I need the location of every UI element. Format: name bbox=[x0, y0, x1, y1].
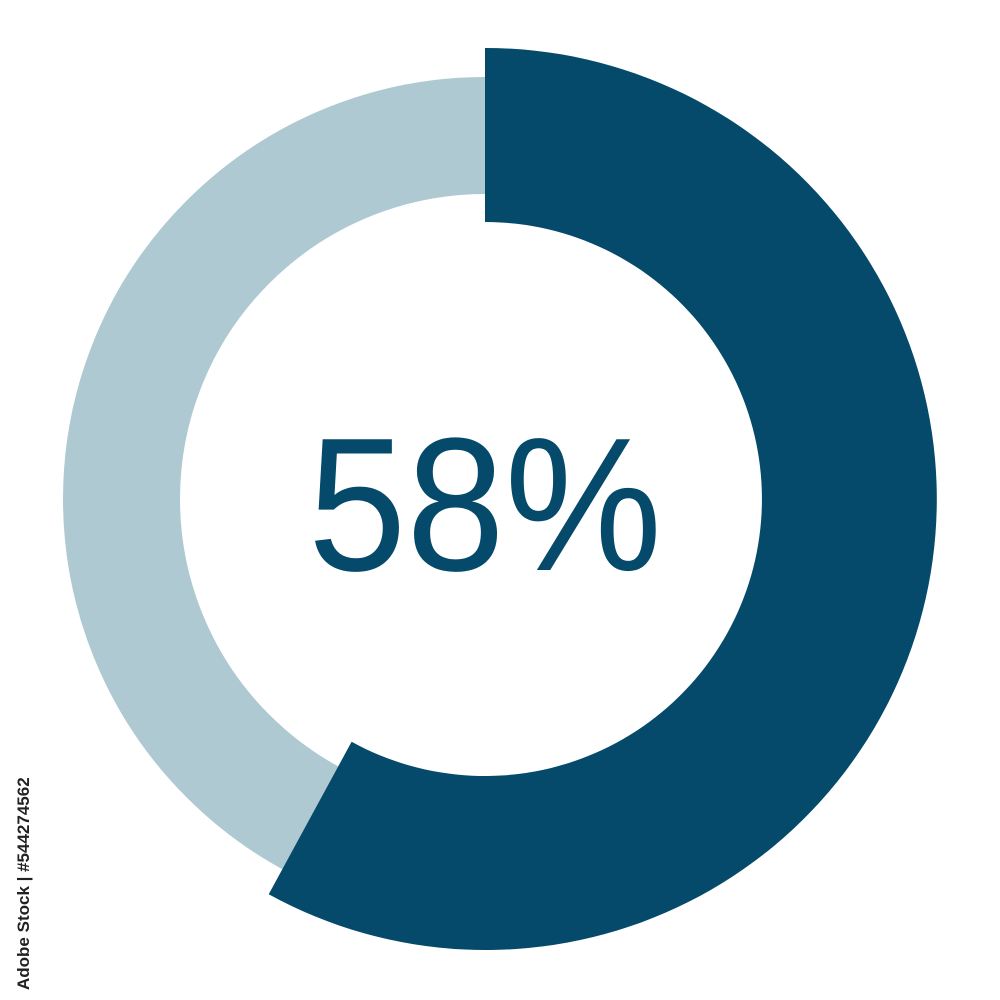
dark arc: 58% bbox=[269, 48, 937, 950]
donut chart bbox=[122, 48, 937, 950]
percentage label: 58% bbox=[308, 399, 662, 611]
side credit text: Adobe Stock | #544274562 bbox=[14, 777, 33, 990]
light ring: remaining 42% bbox=[122, 136, 848, 862]
